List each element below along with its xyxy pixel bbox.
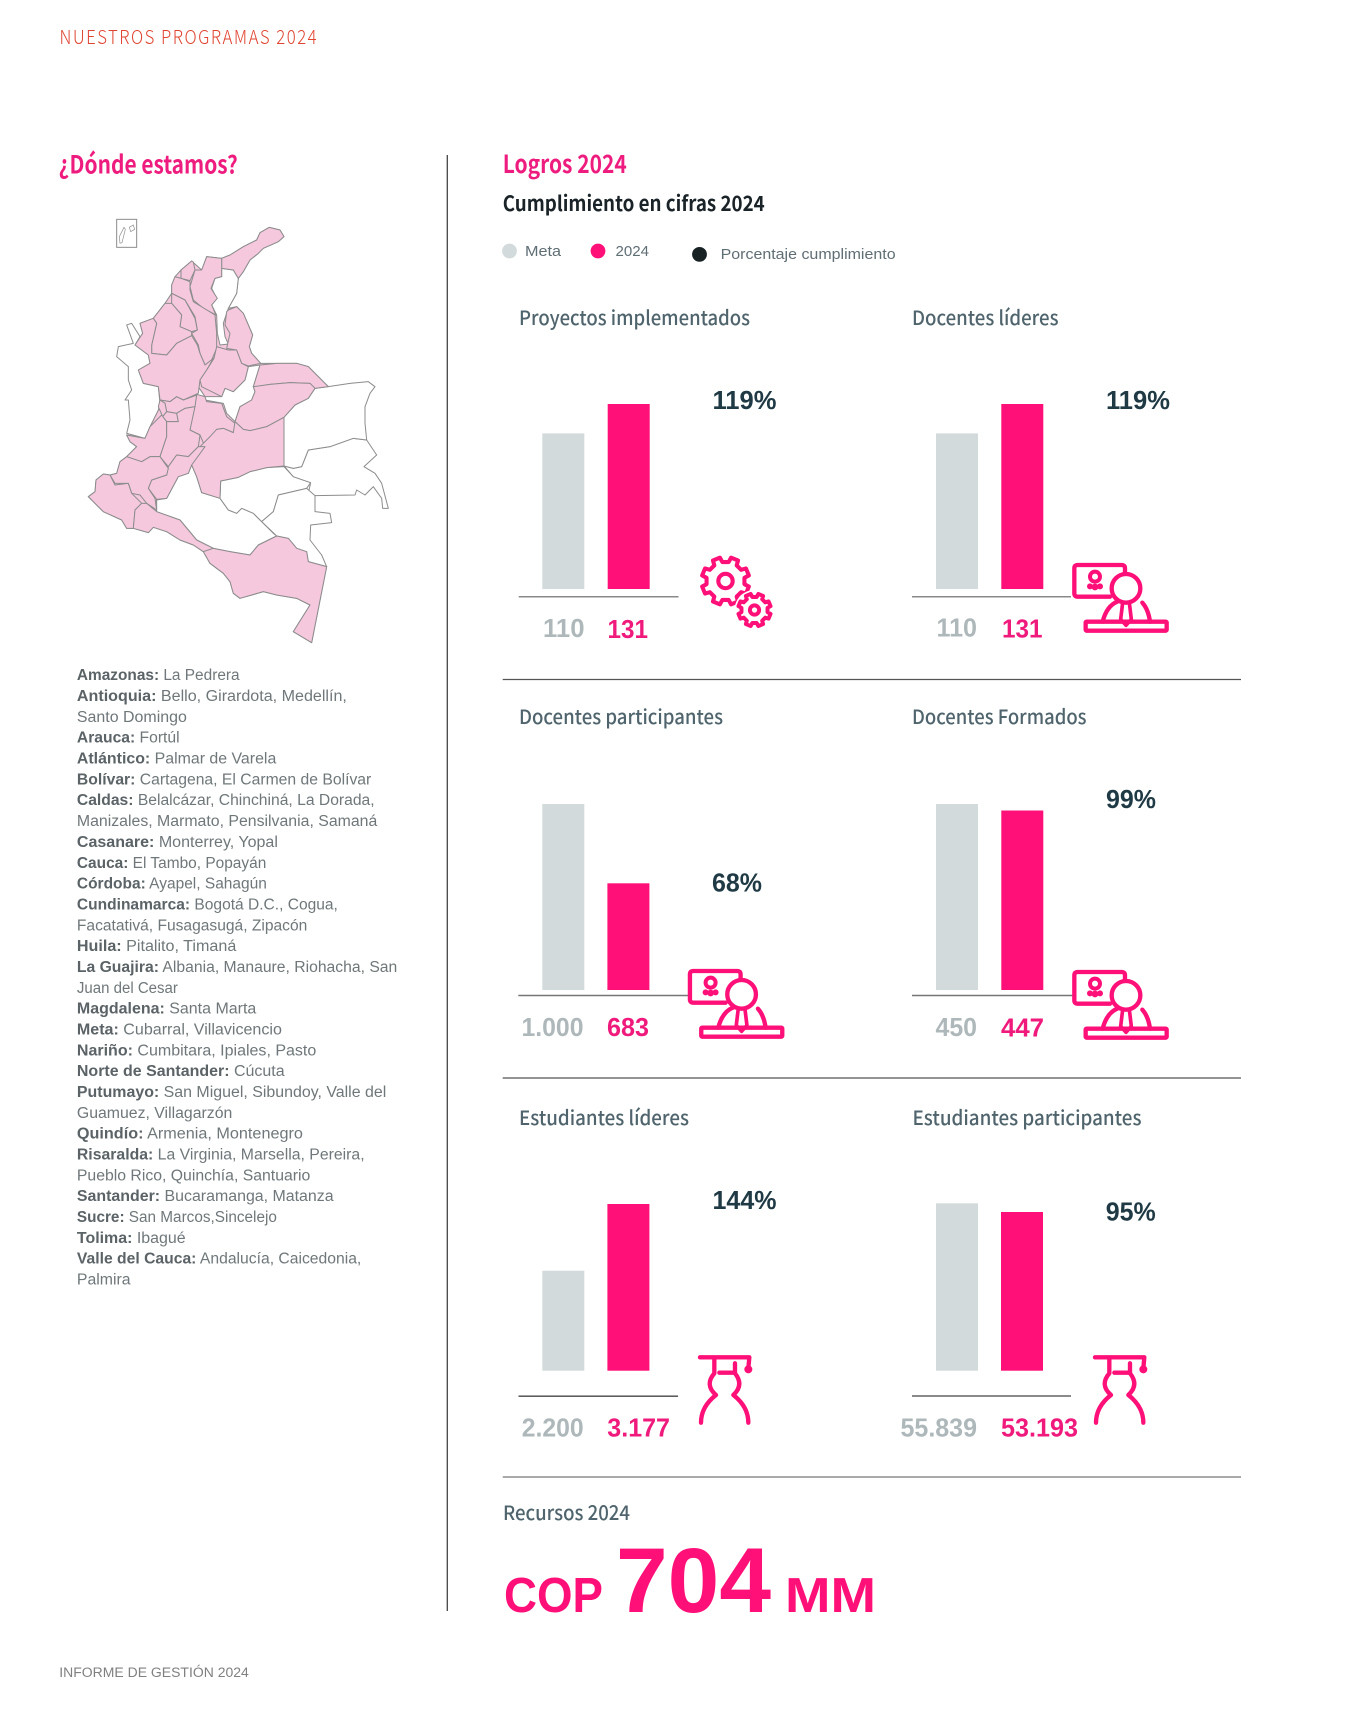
bar chart: 3.177 <box>607 1413 670 1443</box>
list of departments and municipalities: Atlántico: Palmar de Varela <box>77 751 277 768</box>
list of departments and municipalities: Magdalena: Santa Marta <box>77 1001 257 1018</box>
list of departments and municipalities: Huila: Pitalito, Timaná <box>77 938 237 955</box>
list of departments and municipalities: Caldas: Belalcázar, Chinchiná, La Dorada, <box>77 792 375 809</box>
legend: Meta <box>525 243 562 260</box>
panel: docentes participantes: 68% <box>712 868 762 898</box>
list of departments and municipalities <box>77 667 397 1289</box>
list of departments and municipalities: Guamuez, Villagarzón <box>77 1105 232 1122</box>
bar chart <box>900 1203 1078 1443</box>
panel: resources: Recursos 2024 <box>503 1497 630 1526</box>
page header: NUESTROS PROGRAMAS 2024 <box>60 23 317 50</box>
big figure: COP <box>504 1569 603 1623</box>
list of departments and municipalities: Juan del Cesar <box>77 980 178 997</box>
panel: estudiantes líderes <box>518 1102 776 1443</box>
bar chart: 110 <box>936 613 977 643</box>
list of departments and municipalities: Antioquia: Bello, Girardota, Medellín, <box>77 688 347 705</box>
panel: docentes formados: Docentes Formados <box>912 701 1086 730</box>
panel: estudiantes participantes <box>900 1102 1156 1443</box>
bar chart <box>912 804 1075 1042</box>
icon: student <box>1095 1357 1147 1423</box>
bar chart: 683 <box>607 1012 649 1042</box>
panel: proyectos implementados <box>519 302 776 644</box>
panel: docentes líderes: Docentes líderes <box>912 302 1058 331</box>
panel: proyectos implementados: 119% <box>712 385 776 415</box>
bar chart: 55.839 <box>900 1413 977 1443</box>
panel: docentes formados: 99% <box>1106 784 1156 814</box>
list of departments and municipalities: Santo Domingo <box>77 709 187 726</box>
icon: teacher <box>1074 972 1167 1038</box>
list of departments and municipalities: Amazonas: La Pedrera <box>77 667 240 684</box>
legend <box>502 243 896 263</box>
panel: estudiantes participantes: 95% <box>1106 1197 1156 1227</box>
list of departments and municipalities: Quindío: Armenia, Montenegro <box>77 1126 303 1143</box>
list of departments and municipalities: Valle del Cauca: Andalucía, Caicedonia, <box>77 1251 361 1268</box>
icon: teacher <box>690 971 782 1037</box>
list of departments and municipalities: Bolívar: Cartagena, El Carmen de Bolívar <box>77 771 371 788</box>
list of departments and municipalities: Meta: Cubarral, Villavicencio <box>77 1022 282 1039</box>
legend: 2024 <box>616 243 649 260</box>
bar chart <box>518 804 690 1042</box>
list of departments and municipalities: Palmira <box>77 1272 131 1289</box>
bar chart: 110 <box>543 613 584 643</box>
big figure <box>504 1530 876 1632</box>
icon: student <box>700 1357 752 1423</box>
panel: estudiantes líderes: 144% <box>712 1185 776 1215</box>
list of departments and municipalities: Sucre: San Marcos,Sincelejo <box>77 1209 277 1226</box>
big figure: 704 <box>616 1530 771 1632</box>
bar chart <box>912 404 1071 644</box>
list of departments and municipalities: Córdoba: Ayapel, Sahagún <box>77 876 267 893</box>
list of departments and municipalities: Cundinamarca: Bogotá D.C., Cogua, <box>77 896 338 913</box>
list of departments and municipalities: Manizales, Marmato, Pensilvania, Samaná <box>77 813 378 830</box>
list of departments and municipalities: Norte de Santander: Cúcuta <box>77 1063 285 1080</box>
big figure: MM <box>785 1569 876 1623</box>
list of departments and municipalities: Risaralda: La Virginia, Marsella, Pereira, <box>77 1147 365 1164</box>
subheading: compliance in figures: Cumplimiento en cifras 2024 <box>503 188 765 218</box>
panel: docentes participantes <box>518 701 782 1042</box>
inset: San Andrés islands <box>117 219 137 247</box>
bar chart: 53.193 <box>1001 1413 1078 1443</box>
map of Colombia <box>88 219 388 643</box>
list of departments and municipalities: Santander: Bucaramanga, Matanza <box>77 1188 334 1205</box>
list of departments and municipalities: La Guajira: Albania, Manaure, Riohacha, San <box>77 959 397 976</box>
bar chart: 1.000 <box>522 1012 584 1042</box>
bar chart: 131 <box>1002 614 1042 644</box>
panel: estudiantes líderes: Estudiantes líderes <box>519 1102 689 1131</box>
list of departments and municipalities: Pueblo Rico, Quinchía, Santuario <box>77 1167 310 1184</box>
bar chart: 2.200 <box>522 1413 584 1443</box>
list of departments and municipalities: Facatativá, Fusagasugá, Zipacón <box>77 917 307 934</box>
panel: docentes líderes <box>912 302 1170 644</box>
panel: proyectos implementados: Proyectos implementados <box>519 302 750 331</box>
list of departments and municipalities: Arauca: Fortúl <box>77 730 180 747</box>
panel: estudiantes participantes: Estudiantes participantes <box>912 1102 1142 1131</box>
heading: achievements: Logros 2024 <box>503 145 627 181</box>
bar chart: 447 <box>1001 1012 1044 1042</box>
list of departments and municipalities: Putumayo: San Miguel, Sibundoy, Valle del <box>77 1084 386 1101</box>
bar chart: 131 <box>608 614 648 644</box>
list of departments and municipalities: Nariño: Cumbitara, Ipiales, Pasto <box>77 1042 316 1059</box>
panel: resources <box>503 1497 876 1632</box>
icon: teacher <box>1074 565 1167 631</box>
footer: INFORME DE GESTIÓN 2024 <box>59 1665 249 1680</box>
panel: docentes líderes: 119% <box>1106 385 1170 415</box>
bar chart <box>518 1204 678 1443</box>
list of departments and municipalities: Tolima: Ibagué <box>77 1230 186 1247</box>
legend: Porcentaje cumplimiento <box>721 246 896 263</box>
icon: gears <box>702 558 774 630</box>
heading: where we are: ¿Dónde estamos? <box>59 146 238 182</box>
list of departments and municipalities: Cauca: El Tambo, Popayán <box>77 855 266 872</box>
panel: docentes participantes: Docentes participantes <box>519 701 723 730</box>
list of departments and municipalities: Casanare: Monterrey, Yopal <box>77 834 278 851</box>
panel: docentes formados <box>912 701 1167 1042</box>
bar chart: 450 <box>936 1012 977 1042</box>
bar chart <box>519 404 678 644</box>
